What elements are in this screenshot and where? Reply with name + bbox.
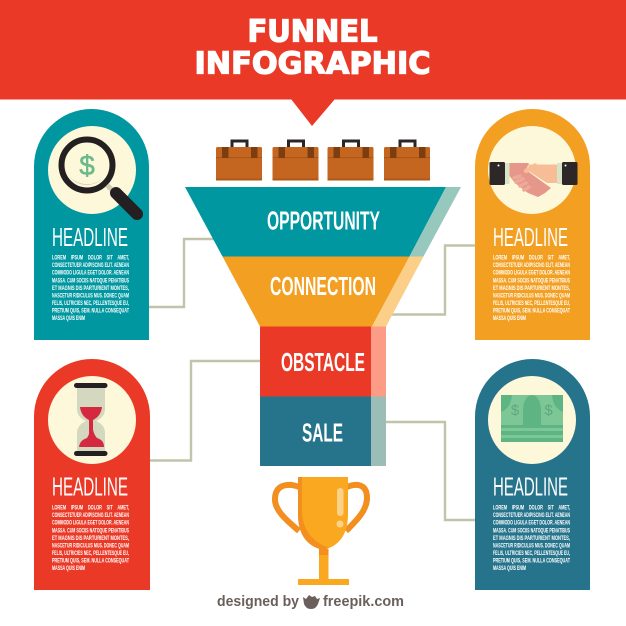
footer credit: designed by <box>217 594 299 610</box>
funnel stage: connection: CONNECTION <box>270 273 376 301</box>
body text: COMMODO LIGULA EGET DOLOR. AENEAN <box>493 520 570 527</box>
body text: LOREM IPSUM DOLOR SIT AMET, <box>52 254 129 262</box>
body text <box>52 254 129 322</box>
body text: MASSA. CUM SOCIIS NATOQUE PENATIBUS <box>493 527 570 534</box>
body text: MASSA. CUM SOCIIS NATOQUE PENATIBUS <box>493 277 570 284</box>
body text: CONSECTETUER ADIPISCING ELIT. AENEAN <box>493 512 570 519</box>
body text: ET MAGNIS DIS PARTURIENT MONTES, <box>493 535 570 542</box>
briefcases <box>216 141 430 180</box>
funnel stage: obstacle: OBSTACLE <box>281 349 365 377</box>
body text: PRETIUM QUIS, SEM. NULLA CONSEQUAT <box>493 557 570 564</box>
body text: MASSA. CUM SOCIIS NATOQUE PENATIBUS <box>52 527 129 534</box>
icon: magnifier with dollar: $ <box>79 150 95 181</box>
header banner <box>0 0 626 126</box>
panel: teal card <box>34 109 149 340</box>
funnel stage: opportunity <box>185 187 461 256</box>
body text: PRETIUM QUIS, SEM. NULLA CONSEQUAT <box>493 307 570 314</box>
icon: handshake <box>490 162 578 197</box>
funnel stage: sale: SALE <box>302 420 343 448</box>
icon: briefcase 2 <box>272 141 318 180</box>
icon: magnifier with dollar <box>62 140 137 214</box>
body text: ET MAGNIS DIS PARTURIENT MONTES, <box>52 535 129 542</box>
body text <box>493 254 570 322</box>
body text: PRETIUM QUIS, SEM. NULLA CONSEQUAT <box>52 307 129 314</box>
body text: LOREM IPSUM DOLOR SIT AMET, <box>52 504 129 512</box>
icon: freepik logo <box>303 595 320 609</box>
title: FUNNEL <box>248 14 378 50</box>
body text: ET MAGNIS DIS PARTURIENT MONTES, <box>52 285 129 292</box>
funnel stage: obstacle <box>260 326 386 396</box>
body text: COMMODO LIGULA EGET DOLOR. AENEAN <box>493 270 570 277</box>
body text <box>52 504 129 572</box>
headline: HEADLINE <box>52 472 128 502</box>
panel: red card <box>34 359 150 590</box>
icon: briefcase 1 <box>216 141 262 180</box>
funnel stage: connection <box>222 256 424 326</box>
title <box>194 14 430 82</box>
body text: FELIS, ULTRICIES NEC, PELLENTESQUE EU, <box>52 300 129 307</box>
title: INFOGRAPHIC <box>194 46 430 82</box>
icon: briefcase 4 <box>384 141 430 180</box>
footer credit: freepik.com <box>323 594 404 610</box>
icon: banknotes <box>501 395 563 442</box>
icon: banknotes: $ <box>511 402 520 419</box>
body text: NASCETUR RIDICULUS MUS. DONEC QUAM <box>493 543 570 550</box>
body text: ET MAGNIS DIS PARTURIENT MONTES, <box>493 285 570 292</box>
body text: MASSA QUIS ENIM <box>493 315 526 322</box>
body text: COMMODO LIGULA EGET DOLOR. AENEAN <box>52 520 129 527</box>
icon: briefcase 3 <box>328 141 374 180</box>
body text: MASSA QUIS ENIM <box>493 565 526 572</box>
body text: COMMODO LIGULA EGET DOLOR. AENEAN <box>52 270 129 277</box>
body text: NASCETUR RIDICULUS MUS. DONEC QUAM <box>52 543 129 550</box>
funnel stage: opportunity: OPPORTUNITY <box>267 208 380 236</box>
footer credit <box>217 594 404 610</box>
body text: CONSECTETUER ADIPISCING ELIT. AENEAN <box>52 512 129 519</box>
headline: HEADLINE <box>493 472 568 502</box>
body text: PRETIUM QUIS, SEM. NULLA CONSEQUAT <box>52 557 129 564</box>
icon: banknotes: $ <box>544 402 553 419</box>
icon: hourglass <box>74 383 108 456</box>
headline: HEADLINE <box>52 222 128 252</box>
body text: LOREM IPSUM DOLOR SIT AMET, <box>493 504 570 512</box>
body text: FELIS, ULTRICIES NEC, PELLENTESQUE EU, <box>52 550 129 557</box>
panel: blue card <box>475 359 590 590</box>
panel: orange card <box>475 109 590 340</box>
icon: trophy <box>275 477 367 585</box>
funnel <box>185 187 461 466</box>
funnel stage: sale <box>260 396 386 466</box>
body text: MASSA QUIS ENIM <box>52 315 85 322</box>
body text: CONSECTETUER ADIPISCING ELIT. AENEAN <box>493 262 570 269</box>
body text: NASCETUR RIDICULUS MUS. DONEC QUAM <box>493 293 570 300</box>
body text: MASSA QUIS ENIM <box>52 565 85 572</box>
body text: MASSA. CUM SOCIIS NATOQUE PENATIBUS <box>52 277 129 284</box>
headline: HEADLINE <box>493 222 568 252</box>
body text: CONSECTETUER ADIPISCING ELIT. AENEAN <box>52 262 129 269</box>
body text <box>493 504 570 572</box>
body text: NASCETUR RIDICULUS MUS. DONEC QUAM <box>52 293 129 300</box>
body text: LOREM IPSUM DOLOR SIT AMET, <box>493 254 570 262</box>
